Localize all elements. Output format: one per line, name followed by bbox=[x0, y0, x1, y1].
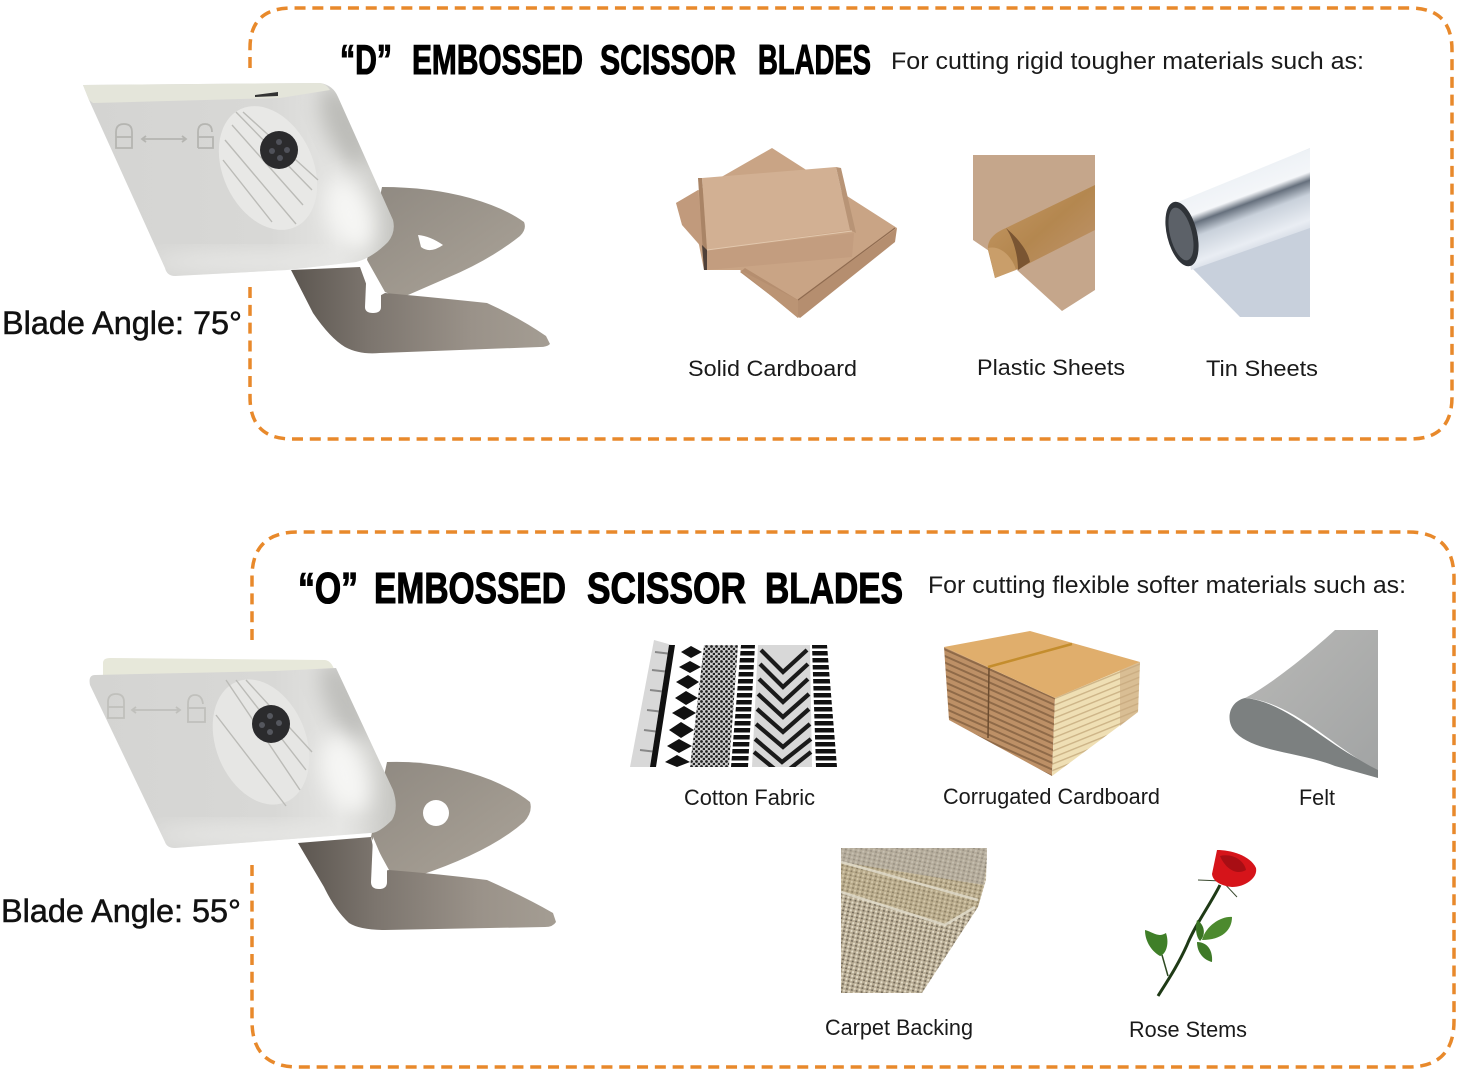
material: cotton fabric rug bbox=[630, 640, 837, 781]
label: corrugated cardboard: Corrugated Cardboard bbox=[943, 784, 1160, 809]
label: blade angle 75: Blade Angle: 75° bbox=[2, 305, 242, 341]
dashed orange border: O panel bbox=[252, 532, 1454, 1067]
upper blade D bbox=[367, 187, 525, 296]
housing O bbox=[90, 668, 396, 848]
heading: O embossed scissor blades bbox=[298, 564, 903, 613]
heading: D embossed scissor blades: BLADES bbox=[758, 36, 871, 83]
upper blade O bbox=[371, 762, 531, 876]
screw D bbox=[260, 131, 298, 169]
material: tin sheets bbox=[1159, 148, 1310, 317]
top strip O bbox=[103, 658, 335, 678]
heading: O embossed scissor blades: “O” bbox=[298, 564, 358, 613]
label: carpet backing: Carpet Backing bbox=[825, 1015, 973, 1040]
housing D bbox=[83, 83, 394, 276]
material: carpet backing bbox=[841, 848, 987, 993]
material: solid cardboard boxes bbox=[676, 148, 897, 318]
embossed oval O bbox=[195, 665, 327, 819]
panel: D embossed scissor blades bbox=[250, 8, 1452, 439]
lower blade D bbox=[291, 267, 550, 353]
top strip D bbox=[83, 83, 330, 103]
label: solid cardboard: Solid Cardboard bbox=[688, 356, 857, 381]
heading: O embossed scissor blades: SCISSOR bbox=[587, 564, 746, 613]
label: plastic sheets: Plastic Sheets bbox=[977, 355, 1125, 380]
label: cotton fabric: Cotton Fabric bbox=[684, 785, 815, 810]
embossed oval D bbox=[200, 90, 336, 246]
lock icons O bbox=[108, 694, 205, 722]
heading: O embossed scissor blades: BLADES bbox=[765, 564, 903, 613]
material: corrugated cardboard stack bbox=[944, 631, 1140, 776]
blade hole D bbox=[418, 235, 443, 250]
blade slot O bbox=[371, 837, 387, 889]
heading: D embossed scissor blades: “D” bbox=[340, 36, 392, 83]
product image: O blade head bbox=[90, 652, 556, 930]
heading: D embossed scissor blades: SCISSOR bbox=[600, 36, 736, 83]
lock icons D bbox=[116, 124, 213, 148]
blade slot D bbox=[365, 260, 381, 313]
screw O bbox=[252, 705, 290, 743]
label: felt: Felt bbox=[1299, 785, 1335, 810]
lower blade O bbox=[298, 837, 556, 930]
heading: O embossed scissor blades: EMBOSSED bbox=[374, 564, 566, 613]
material: felt roll bbox=[1230, 630, 1378, 778]
subheading: flexible materials: For cutting flexible softer materials such as: bbox=[928, 572, 1406, 599]
dashed orange border: D panel bbox=[250, 8, 1452, 439]
heading: D embossed scissor blades: EMBOSSED bbox=[412, 36, 583, 83]
label: rose stems: Rose Stems bbox=[1129, 1017, 1247, 1042]
panel: O embossed scissor blades bbox=[252, 532, 1454, 1067]
subheading: rigid materials: For cutting rigid tougher materials such as: bbox=[891, 48, 1364, 75]
blade hole O bbox=[423, 800, 449, 826]
heading: D embossed scissor blades bbox=[340, 36, 871, 83]
material: rose bbox=[1145, 850, 1256, 996]
product image: D blade head bbox=[83, 77, 550, 353]
label: blade angle 55: Blade Angle: 55° bbox=[1, 893, 241, 929]
material: plastic sheets bbox=[973, 155, 1095, 311]
label: tin sheets: Tin Sheets bbox=[1206, 356, 1318, 381]
